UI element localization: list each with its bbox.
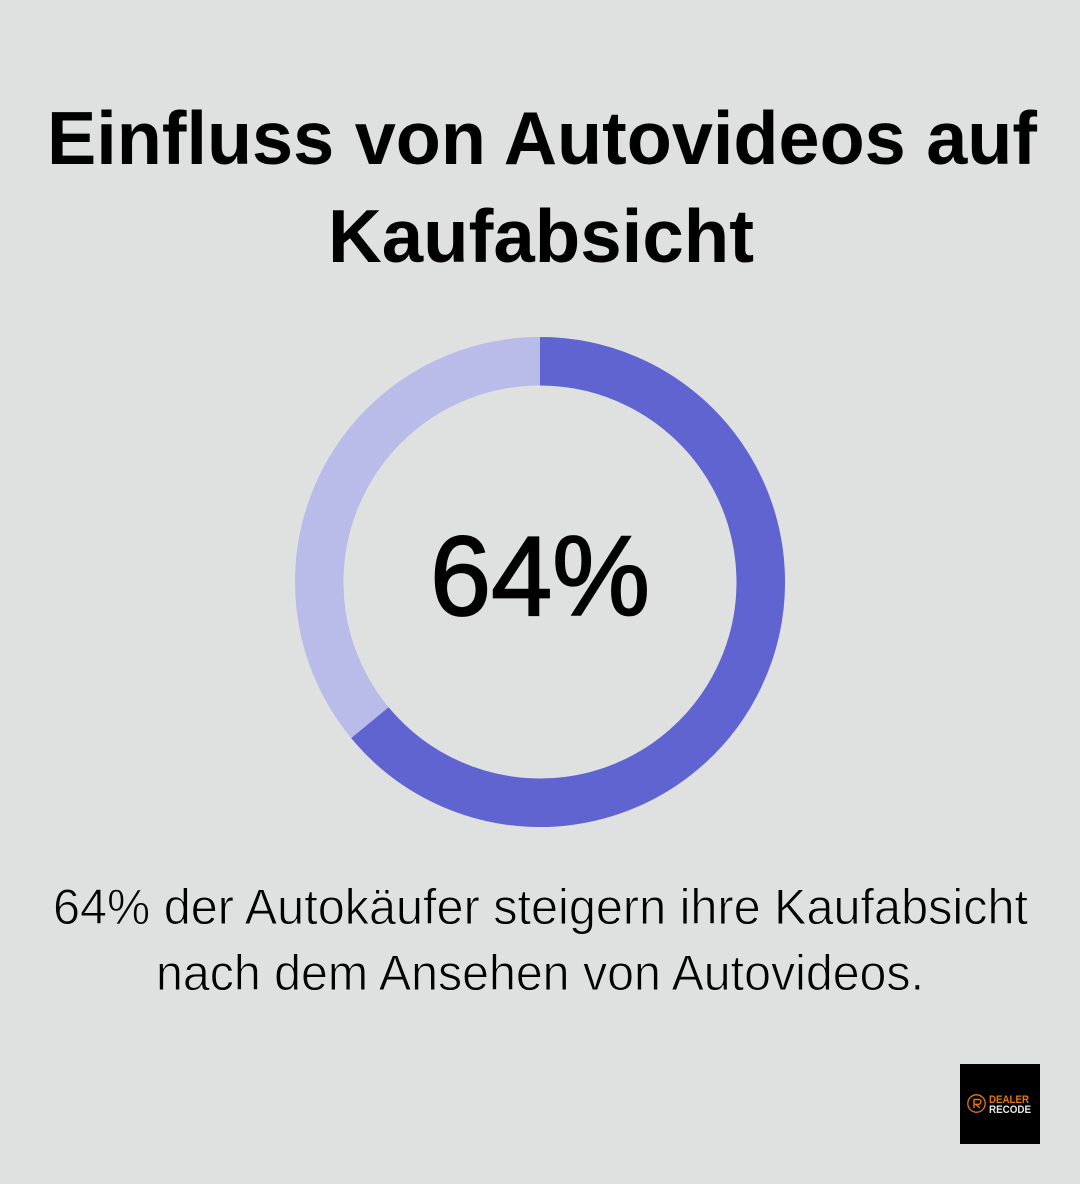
logo wordmark: [989, 1094, 1031, 1116]
logo wordmark: RECODE: [989, 1104, 1031, 1116]
donut chart: 64%: [319, 361, 761, 803]
logo wordmark: DEALER: [989, 1094, 1029, 1106]
title: Einfluss von Autovideos auf: [47, 96, 1038, 180]
title: Kaufabsicht: [328, 194, 754, 278]
description: [53, 879, 1028, 1001]
donut track: remaining 36%: [319, 361, 761, 803]
logo icon: [968, 1095, 985, 1112]
donut segment: 64%: [370, 361, 761, 803]
description: 64% der Autokäufer steigern ihre Kaufabsicht: [53, 879, 1028, 935]
title: [47, 96, 1038, 278]
description: nach dem Ansehen von Autovideos.: [156, 945, 924, 1001]
center value: 64%: [430, 513, 650, 639]
logo: Dealer Recode: [960, 1064, 1040, 1144]
